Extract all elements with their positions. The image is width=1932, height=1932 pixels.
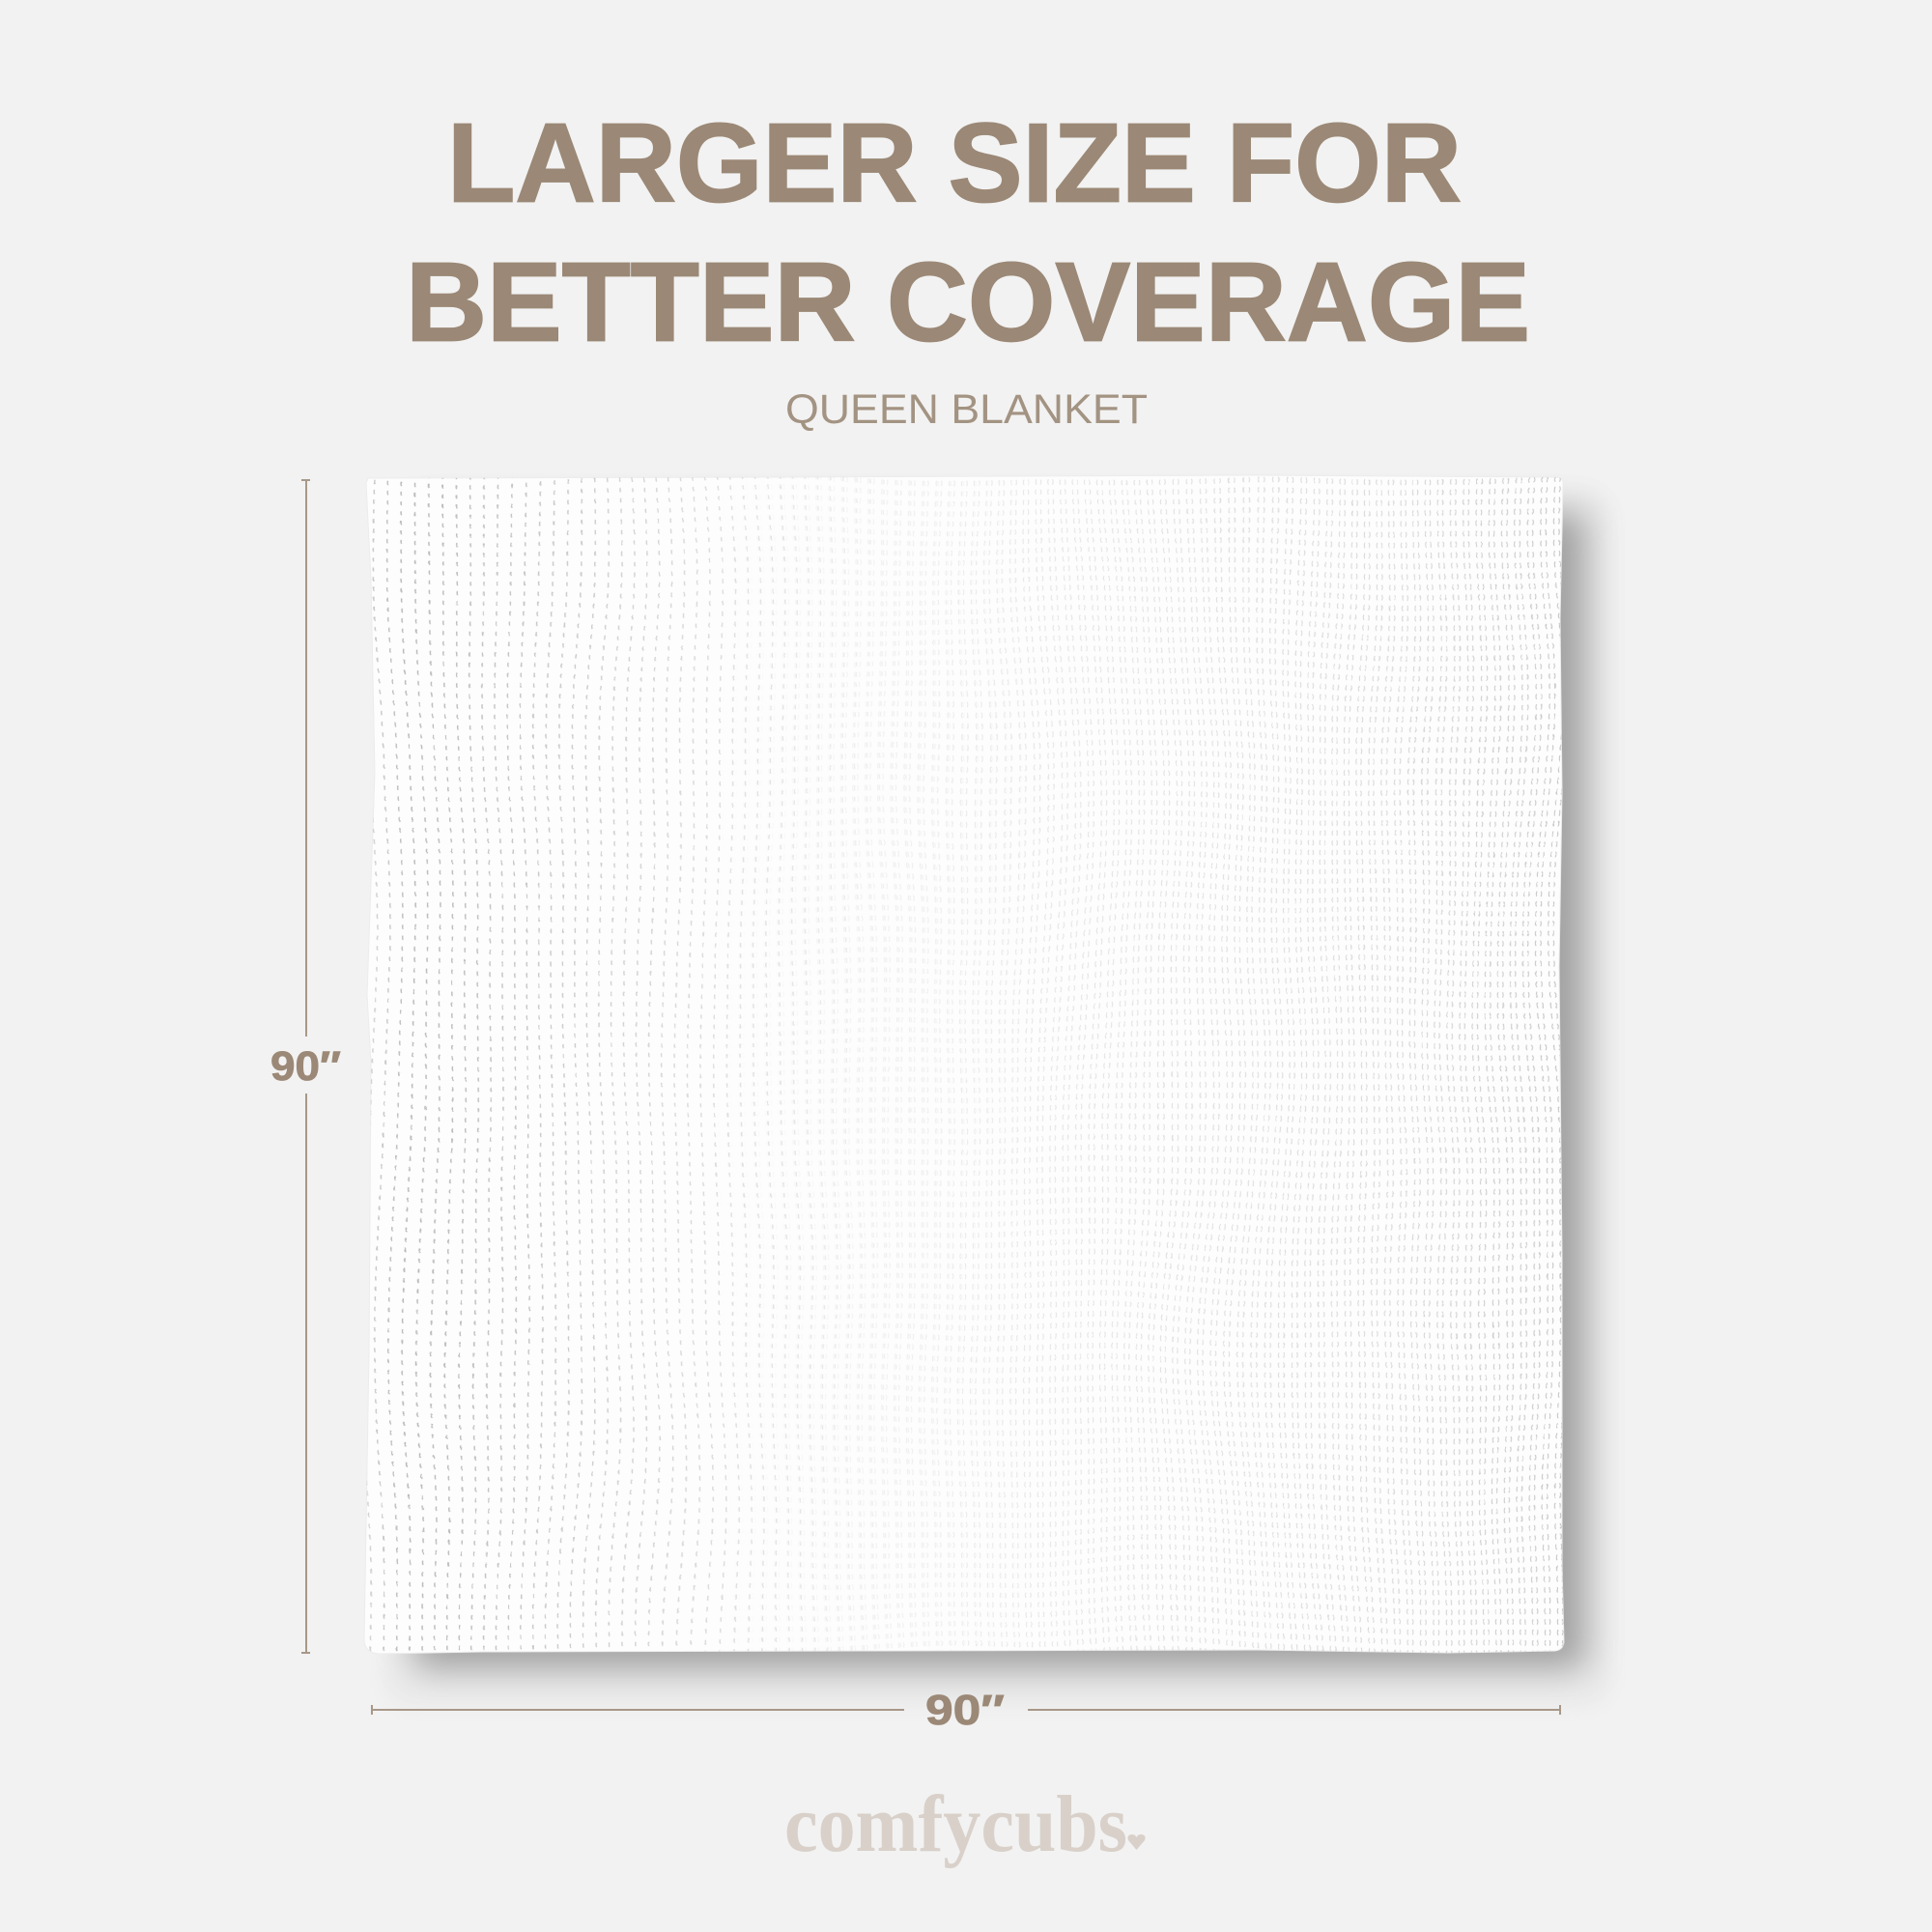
- title: [406, 100, 1530, 365]
- subtitle: QUEEN BLANKET: [785, 386, 1148, 433]
- height dimension line: [270, 480, 341, 1653]
- icon: heart: [1127, 1834, 1146, 1850]
- logo: comfycubs: [784, 1779, 1127, 1869]
- infographic canvas: [271, 122, 1611, 1868]
- blanket: [365, 475, 1565, 1654]
- height label: 90″: [270, 1043, 341, 1090]
- blanket shadow: [382, 488, 1613, 1710]
- title: LARGER SIZE FOR: [447, 100, 1462, 226]
- blanket fabric: [364, 475, 1564, 1654]
- width dimension line: [372, 1687, 1560, 1734]
- waffle weave texture: [367, 477, 1564, 1653]
- width label: 90″: [925, 1687, 1005, 1734]
- title: BETTER COVERAGE: [406, 240, 1530, 365]
